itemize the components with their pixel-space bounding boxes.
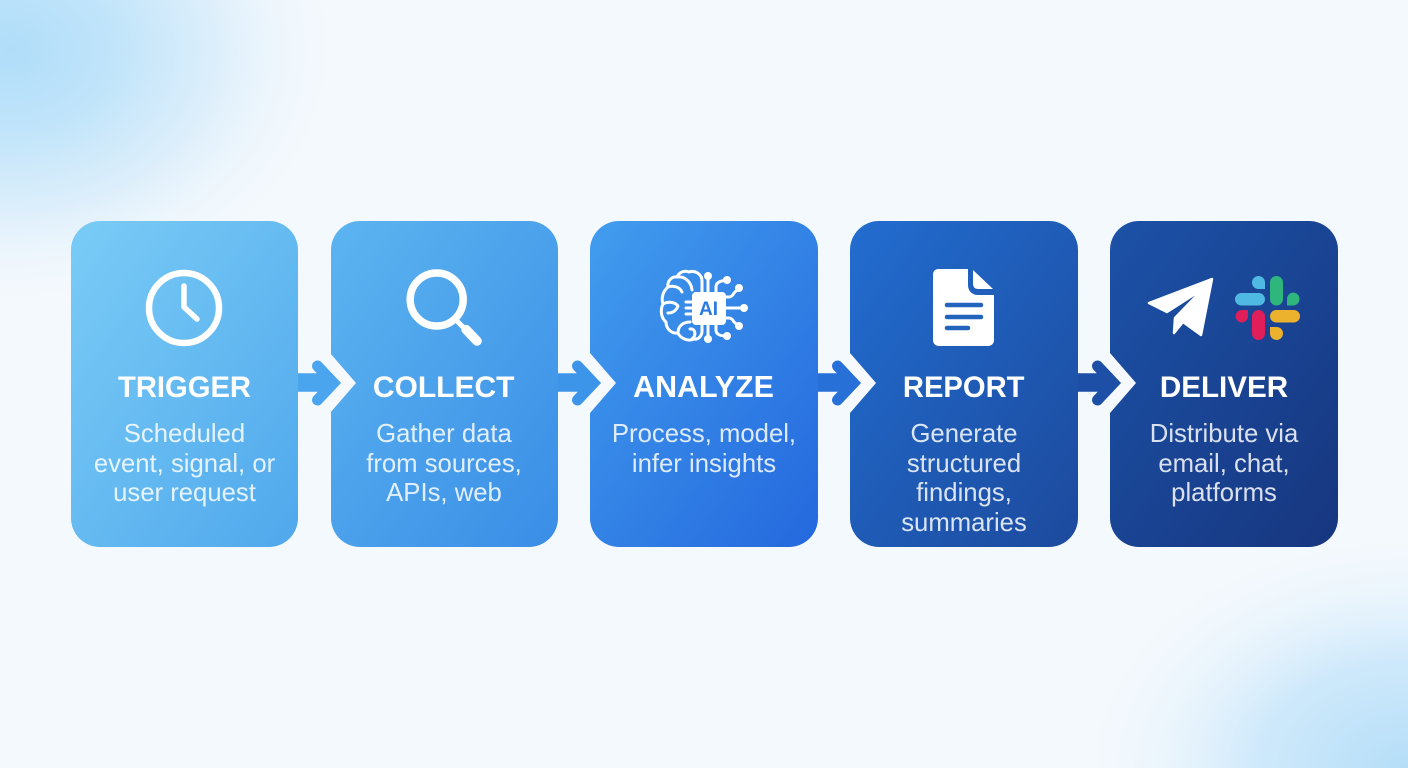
text: deliver description (1150, 420, 1299, 507)
heading: collect: COLLECT (373, 371, 515, 404)
arrow: trigger to collect (298, 353, 356, 413)
heading: trigger: TRIGGER (118, 372, 251, 404)
text: collect description (366, 420, 522, 507)
icon: AI brain: AI (699, 299, 718, 320)
text: report description (901, 420, 1027, 537)
text: deliver description: platforms (1171, 479, 1277, 507)
text: analyze description (612, 420, 796, 478)
text: collect description: Gather data (376, 420, 513, 448)
icon: document (933, 269, 994, 346)
panel: collect (331, 221, 558, 547)
icon: clock (149, 273, 219, 343)
text: trigger description: event, signal, or (94, 450, 276, 478)
text: collect description: from sources, (366, 450, 522, 478)
text: trigger description: Scheduled (124, 420, 245, 448)
text: trigger description: user request (113, 479, 256, 507)
panel: analyze (590, 221, 818, 547)
heading: analyze: ANALYZE (633, 370, 774, 404)
text: report description: Generate (910, 420, 1018, 448)
text: report description: summaries (901, 509, 1027, 537)
icon: magnifying glass (410, 273, 477, 341)
arrow: collect to analyze (558, 353, 616, 413)
text: report description: findings, (916, 479, 1012, 507)
panel: trigger (71, 221, 298, 547)
text: collect description: APIs, web (386, 479, 502, 507)
arrow: analyze to report (818, 353, 876, 413)
icon: AI brain (661, 271, 748, 343)
heading: report: REPORT (903, 372, 1025, 404)
panel: report (850, 221, 1078, 547)
icon: paper plane (1149, 279, 1212, 335)
icon: slack logo (1235, 276, 1300, 340)
heading: deliver: DELIVER (1160, 371, 1288, 404)
text: report description: structured (907, 450, 1021, 478)
panel: deliver (1110, 221, 1338, 547)
arrow: report to deliver (1078, 353, 1136, 413)
text: analyze description: Process, model, (612, 420, 796, 448)
text: trigger description (94, 420, 276, 507)
text: deliver description: email, chat, (1158, 450, 1290, 478)
text: deliver description: Distribute via (1150, 420, 1299, 448)
text: analyze description: infer insights (632, 450, 776, 478)
